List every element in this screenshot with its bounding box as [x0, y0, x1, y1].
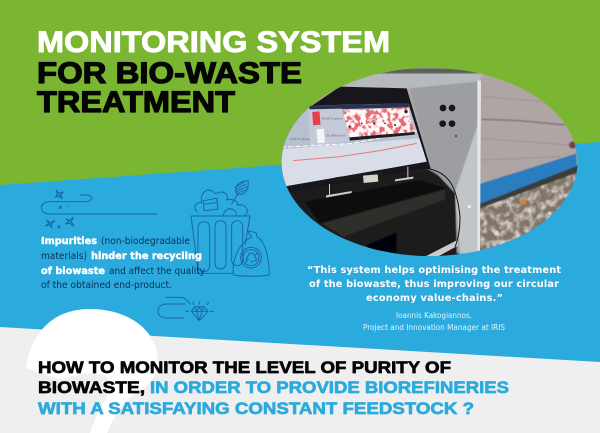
line 2: hinder the recycling [91, 251, 202, 262]
quote attribution [363, 311, 505, 332]
bin body [191, 216, 250, 273]
dark cabinet base [288, 169, 460, 256]
title [37, 26, 390, 119]
cabinet side panel [410, 81, 481, 253]
line 3: of biowaste [41, 266, 105, 277]
background: green header [0, 0, 600, 185]
quote [307, 265, 561, 304]
icon: diamond line [158, 297, 214, 321]
attribution name: Ioannis Kakogiannos, [396, 311, 472, 320]
line 3 [41, 266, 205, 277]
monitor brackets [326, 167, 413, 198]
line 4: of the obtained end-product. [41, 280, 172, 291]
background: blue band [0, 100, 600, 362]
monitor screen: 55.00% food [326, 134, 345, 138]
monitor screen: 4.00 % stone [290, 137, 310, 141]
screen gauges [312, 111, 320, 125]
pink microscopy image [343, 108, 415, 140]
monitor screen [277, 103, 427, 186]
line 1: (non-biodegradable [101, 236, 190, 247]
bottom rail [426, 240, 458, 256]
top-left sparkle line icon [41, 190, 157, 228]
question line 2: IN ORDER TO PROVIDE BIOREFINERIES [150, 378, 509, 397]
photo background wall [282, 68, 578, 254]
photo: monitoring unit with screen [282, 68, 578, 256]
decorative white question mark [26, 309, 158, 433]
line 2 [41, 251, 202, 262]
line 1 [41, 236, 190, 247]
attribution role: Project and Innovation Manager at IRIS [363, 323, 505, 332]
ground with debris [480, 172, 576, 250]
title line 2: FOR BIO-WASTE [37, 57, 302, 90]
quote line 1: “This system helps optimising the treatment [307, 265, 561, 276]
monitor screen: 45.00% wood [322, 116, 342, 120]
title line 1: MONITORING SYSTEM [37, 26, 390, 59]
cabinet top frame [338, 72, 483, 88]
quote line 3: economy value-chains.” [366, 293, 503, 304]
monitor bezel [278, 87, 431, 193]
quote line 2: of the biowaste, thus improving our circular [309, 279, 559, 290]
title line 3: TREATMENT [37, 86, 235, 119]
line 1: Impurities [41, 236, 97, 247]
question line 1: HOW TO MONITOR THE LEVEL OF PURITY OF [38, 358, 451, 377]
bottom question heading [38, 358, 509, 418]
question line 2 [38, 378, 509, 397]
bin contents [195, 190, 247, 215]
line 3: and affect the quality [109, 266, 205, 277]
recycling bag [233, 231, 269, 276]
line 2: materials) [41, 251, 87, 262]
question line 2: BIOWASTE, [38, 378, 145, 397]
cable [427, 168, 460, 247]
icon: trash bin with recycling bag [191, 181, 269, 276]
blue curb [479, 153, 577, 204]
question line 3: WITH A SATISFAYING CONSTANT FEEDSTOCK ? [38, 399, 474, 418]
left text block [41, 236, 205, 291]
fishbone waste [232, 181, 248, 204]
